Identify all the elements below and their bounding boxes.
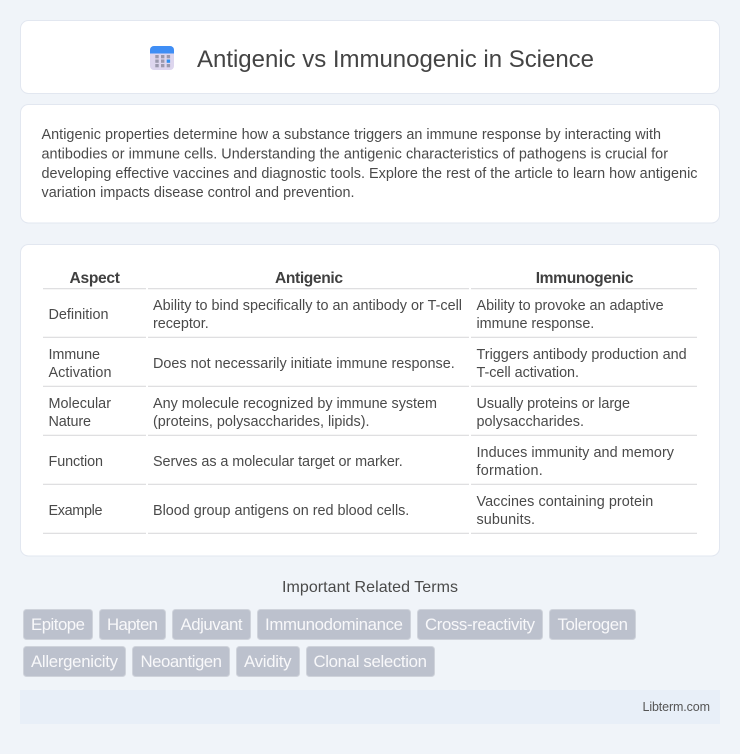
footer bar <box>20 690 720 724</box>
heading: related terms: Important Related Terms <box>282 579 458 596</box>
row: molecular nature <box>48 396 630 430</box>
row: definition: immune response. <box>476 316 594 332</box>
tag: Tolerogen: Tolerogen <box>558 615 628 634</box>
tag: Hapten <box>100 610 166 640</box>
tag: Adjuvant: Adjuvant <box>180 615 243 634</box>
row: immune activation: Activation <box>48 365 112 381</box>
tag: Tolerogen <box>550 610 636 640</box>
tag: Cross-reactivity <box>418 610 542 640</box>
row: example: subunits. <box>476 512 535 528</box>
row: definition: Ability to bind specifically to an antibody or T-cell <box>153 298 462 314</box>
table header row: Immunogenic <box>536 270 634 287</box>
intro paragraph: Antigenic properties determine how a substance triggers an immune response by interacting with <box>42 127 661 143</box>
tag: Epitope <box>24 610 92 640</box>
icon: calendar <box>150 46 174 70</box>
tag: Neoantigen: Neoantigen <box>140 652 222 671</box>
tag: Avidity <box>236 646 300 676</box>
table header row <box>70 270 634 287</box>
row: function: Induces immunity and memory <box>476 445 675 461</box>
intro paragraph: antibodies or immune cells. Understanding the antigenic characteristics of pathogens is crucial for <box>42 146 668 162</box>
row: function: formation. <box>476 463 543 479</box>
tag: Cross-reactivity: Cross-reactivity <box>425 615 536 634</box>
intro paragraph: variation impacts disease control and prevention. <box>42 185 354 201</box>
tag: Allergenicity: Allergenicity <box>31 652 119 671</box>
row: definition: Definition <box>48 307 108 323</box>
tag: Hapten: Hapten <box>107 615 158 634</box>
tag: Epitope: Epitope <box>31 615 85 634</box>
tag: Immunodominance: Immunodominance <box>265 615 403 634</box>
tag: Adjuvant <box>172 610 250 640</box>
table header row: Antigenic <box>275 270 343 287</box>
tag: Allergenicity <box>24 646 126 676</box>
row: molecular nature: polysaccharides. <box>476 414 584 430</box>
title: Antigenic vs Immunogenic in Science <box>197 46 594 73</box>
row: immune activation: Triggers antibody production and <box>476 347 687 363</box>
table header row: Aspect <box>70 270 120 287</box>
row: molecular nature: Nature <box>48 414 91 430</box>
tag list <box>24 610 636 676</box>
panel: comparison table <box>20 244 720 556</box>
tag: Neoantigen <box>132 646 230 676</box>
row: molecular nature: Molecular <box>48 396 111 412</box>
row: molecular nature: Usually proteins or large <box>476 396 630 412</box>
row: function <box>48 445 675 479</box>
tag: Avidity: Avidity <box>244 652 292 671</box>
row: molecular nature: (proteins, polysaccharides, lipids). <box>153 414 370 430</box>
row: immune activation <box>48 347 687 381</box>
tag: Clonal selection <box>306 646 434 676</box>
row: definition: Ability to provoke an adaptive <box>476 298 664 314</box>
row: definition <box>48 298 664 332</box>
tag: Clonal selection: Clonal selection <box>314 652 427 671</box>
row: immune activation: T-cell activation. <box>476 365 579 381</box>
footer credit: Libterm.com <box>642 700 710 714</box>
intro paragraph <box>42 127 698 201</box>
row: example <box>48 494 653 528</box>
row: molecular nature: Any molecule recognized by immune system <box>153 396 437 412</box>
intro paragraph: developing effective vaccines and diagnostic tools. Explore the rest of the article to learn how antigenic <box>42 166 698 182</box>
panel: introduction <box>20 104 720 223</box>
panel: title header <box>20 20 720 94</box>
row: example: Example <box>48 503 102 519</box>
row: definition: receptor. <box>153 316 209 332</box>
row: example: Vaccines containing protein <box>476 494 653 510</box>
row: example: Blood group antigens on red blood cells. <box>153 503 409 519</box>
row: function: Function <box>48 454 103 470</box>
row: immune activation: Immune <box>48 347 100 363</box>
row: immune activation: Does not necessarily initiate immune response. <box>153 356 455 372</box>
row: function: Serves as a molecular target or marker. <box>153 454 403 470</box>
tag: Immunodominance <box>258 610 410 640</box>
